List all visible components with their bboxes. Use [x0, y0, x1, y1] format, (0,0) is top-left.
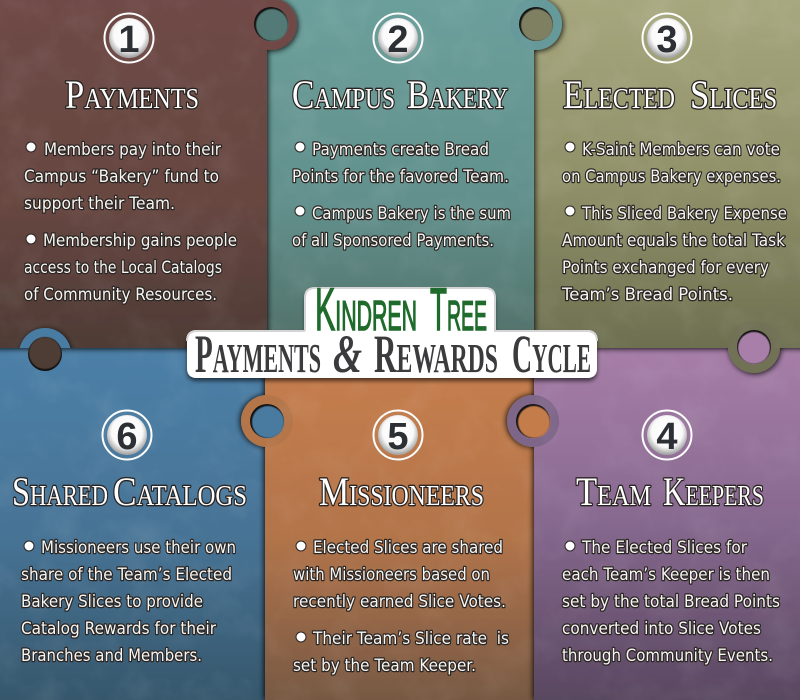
text block: campus bakery: of all Sponsored Payments.: [292, 231, 494, 251]
heading: team keepers: TEAM: [576, 469, 651, 514]
text block: team keepers: The Elected Slices for: [581, 538, 747, 558]
text block: elected slices: Team’s Bread Points.: [561, 285, 733, 305]
step number 5: 5: [387, 416, 409, 458]
text block: missioneers: with Missioneers based on: [293, 565, 490, 585]
text block: team keepers: each Team’s Keeper is then: [562, 565, 770, 585]
title: kindren tree: TREE: [430, 276, 487, 343]
step number 5: [374, 410, 422, 460]
heading: shared catalogs: [12, 469, 247, 514]
text block: shared catalogs: Bakery Slices to provide: [21, 592, 203, 612]
text block: campus bakery: [292, 140, 511, 251]
text block: payments: Campus “Bakery” fund to: [24, 167, 219, 187]
text block: shared catalogs: Missioneers use their own: [41, 538, 236, 558]
ring: blue connector: [19, 328, 71, 380]
heading: payments: PAYMENTS: [65, 72, 199, 117]
step number 3: [642, 14, 692, 62]
heading: shared catalogs: CATALOGS: [113, 469, 247, 514]
subtitle: payments and rewards cycle: [195, 324, 591, 384]
ring: orange connector: [250, 404, 284, 438]
text block: payments: Membership gains people: [43, 231, 237, 251]
text block: team keepers: converted into Slice Votes: [562, 619, 761, 639]
text block: elected slices: [561, 140, 787, 305]
step number 1: 1: [118, 19, 140, 61]
subtitle: payments and rewards cycle: &: [333, 324, 362, 384]
panel: missioneers: [241, 340, 537, 700]
text block: team keepers: through Community Events.: [562, 646, 773, 666]
step number 4: 4: [656, 416, 678, 458]
panel: team keepers: [507, 340, 800, 700]
heading: campus bakery: CAMPUS: [292, 72, 395, 117]
heading: shared catalogs: SHARED: [12, 469, 108, 514]
subtitle: payments and rewards cycle: CYCLE: [512, 324, 591, 384]
text block: missioneers: recently earned Slice Votes.: [293, 592, 506, 612]
panel: elected slices: [530, 0, 800, 373]
text block: elected slices: Points exchanged for every: [562, 258, 769, 278]
subtitle: payments and rewards cycle: REWARDS: [374, 324, 498, 384]
text block: payments: support their Team.: [24, 194, 175, 214]
step number 1: [104, 14, 154, 62]
text block: shared catalogs: Branches and Members.: [21, 646, 202, 666]
panel: shared catalogs: [0, 340, 270, 700]
heading: campus bakery: [292, 72, 508, 117]
step number 6: 6: [116, 416, 138, 458]
step number 2: 2: [387, 19, 409, 61]
title banner: [187, 276, 597, 384]
step number 2: [374, 14, 422, 62]
text block: campus bakery: Points for the favored Team.: [292, 167, 509, 187]
step number 3: 3: [656, 19, 678, 61]
text block: shared catalogs: Catalog Rewards for their: [21, 619, 216, 639]
text block: elected slices: K-Saint Members can vote: [582, 140, 780, 160]
text block: payments: of Community Resources.: [24, 285, 217, 305]
text block: payments: [24, 140, 237, 305]
heading: team keepers: [576, 469, 764, 514]
banner plates: [187, 288, 597, 378]
text block: missioneers: set by the Team Keeper.: [293, 656, 476, 676]
title: kindren tree: KINDREN: [315, 276, 417, 343]
text block: campus bakery: Campus Bakery is the sum: [312, 204, 511, 224]
ring: brown connector: [254, 7, 288, 41]
text block: payments: Members pay into their: [44, 140, 221, 160]
text block: missioneers: [293, 538, 509, 676]
ring: olive connector: [737, 330, 771, 364]
heading: elected slices: SLICES: [690, 72, 777, 117]
heading: elected slices: ELECTED: [563, 72, 675, 117]
text block: shared catalogs: [21, 538, 236, 666]
text block: shared catalogs: share of the Team’s Elected: [21, 565, 232, 585]
text block: campus bakery: Payments create Bread: [312, 140, 489, 160]
heading: elected slices: [563, 72, 777, 117]
step number 4: [642, 410, 692, 460]
heading: campus bakery: BAKERY: [407, 72, 508, 117]
text block: missioneers: Their Team’s Slice rate is: [312, 629, 509, 649]
panel: payments: [0, 0, 297, 348]
text block: team keepers: [562, 538, 780, 666]
heading: team keepers: KEEPERS: [663, 469, 764, 514]
ring: teal connector: [519, 7, 553, 41]
text block: payments: access to the Local Catalogs: [24, 258, 222, 278]
subtitle: payments and rewards cycle: PAYMENTS: [195, 324, 321, 384]
ring: purple connector: [516, 404, 550, 438]
step number 6: [102, 410, 152, 460]
panel: campus bakery: [260, 0, 562, 348]
heading: missioneers: MISSIONEERS: [319, 469, 484, 514]
text block: team keepers: set by the total Bread Points: [562, 592, 780, 612]
text block: missioneers: Elected Slices are shared: [313, 538, 503, 558]
